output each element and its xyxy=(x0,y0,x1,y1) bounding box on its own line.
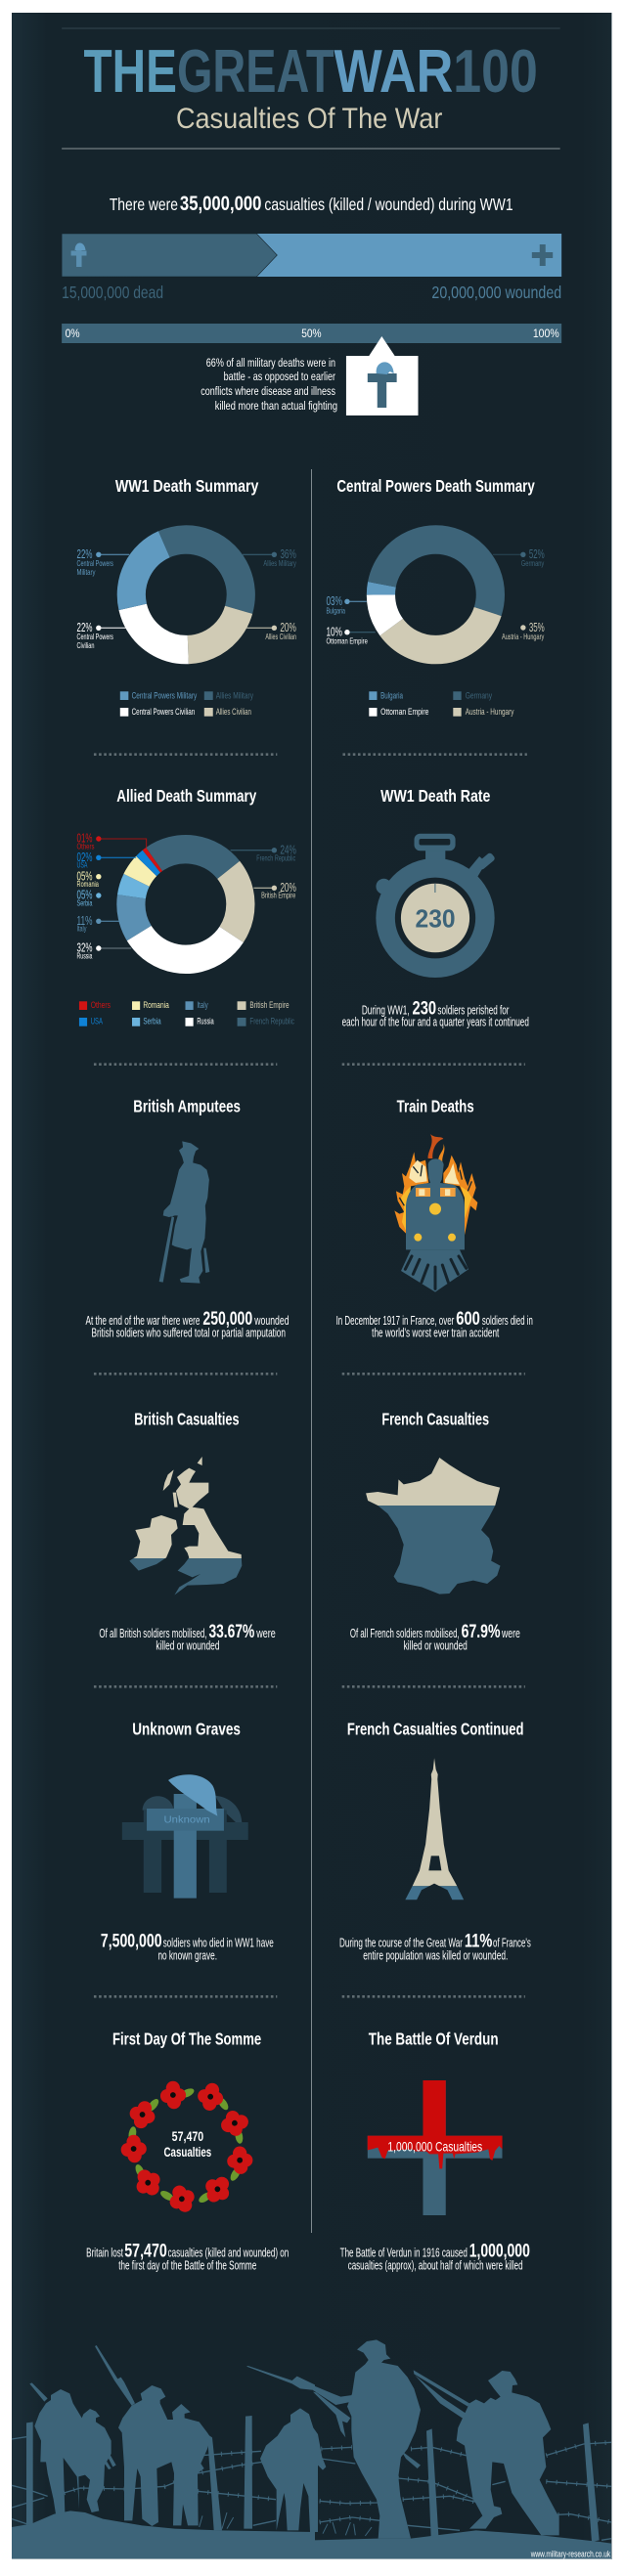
caption: entire population was killed or wounded. xyxy=(363,1948,508,1963)
callouts: 22% xyxy=(77,547,92,561)
ground xyxy=(313,2530,611,2558)
legend: Italy xyxy=(197,1000,208,1010)
title: WAR xyxy=(334,38,453,106)
callouts: Ottoman Empire xyxy=(326,637,368,646)
caption: of France's xyxy=(493,1936,531,1950)
66 percent note: battle - as opposed to earlier xyxy=(224,370,335,383)
title: THE xyxy=(84,38,177,106)
donut chart xyxy=(380,540,490,650)
icon: map of british isles xyxy=(129,1457,242,1595)
heading: First Day Of The Somme xyxy=(112,2029,261,2048)
caption: Of all British soldiers mobilised, xyxy=(99,1626,206,1640)
caption: casualties (killed and wounded) on xyxy=(168,2246,289,2260)
percentage scale: 0% xyxy=(66,327,80,340)
dead label: 15,000,000 dead xyxy=(62,283,163,302)
caption: In December 1917 in France, over xyxy=(336,1313,455,1328)
icon: medical cross xyxy=(532,244,553,266)
icon: cross with helmet xyxy=(71,242,86,267)
heading: WW1 Death Summary xyxy=(115,476,258,496)
legend: Austria - Hungary xyxy=(466,707,514,717)
fence posts xyxy=(26,2416,252,2530)
legend: Others xyxy=(91,1000,111,1010)
donut chart xyxy=(114,522,258,667)
center divider xyxy=(311,469,313,2233)
caption: 33.67% xyxy=(208,1622,254,1642)
panel: french casualties xyxy=(350,1409,520,1653)
heading: The Battle Of Verdun xyxy=(369,2029,499,2048)
icon: stopwatch xyxy=(376,834,496,978)
percentage scale: 100% xyxy=(533,327,559,340)
title xyxy=(84,38,538,106)
casualties summary xyxy=(62,193,561,415)
dead versus wounded bar xyxy=(62,234,561,277)
heading: French Casualties Continued xyxy=(347,1719,523,1738)
heading: Central Powers Death Summary xyxy=(336,476,535,496)
panel: train deaths xyxy=(336,1096,533,1340)
callouts: Civilian xyxy=(77,641,94,650)
legend: Allies Civilian xyxy=(216,707,251,717)
panel: french casualties continued xyxy=(339,1719,531,1963)
callouts: Others xyxy=(77,843,94,851)
soldiers 7 and 8 with rifles xyxy=(414,2370,559,2535)
right edge line xyxy=(611,13,612,2559)
66 percent note: killed more than actual fighting xyxy=(215,399,337,413)
callouts: 03% xyxy=(326,594,342,608)
legend: Germany xyxy=(466,690,492,700)
callouts: Austria - Hungary xyxy=(502,633,544,641)
caption: During the course of the Great War xyxy=(339,1936,463,1950)
legend: British Empire xyxy=(249,1000,290,1010)
callouts: Central Powers xyxy=(77,633,113,641)
wounded label: 20,000,000 wounded xyxy=(431,283,561,302)
caption: British soldiers who suffered total or partial amputation xyxy=(91,1326,286,1340)
icon: poppy wreath xyxy=(121,2080,252,2216)
soldier 6 xyxy=(313,2339,421,2539)
callouts: Military xyxy=(77,568,95,577)
66 percent note: 66% of all military deaths were in xyxy=(206,356,335,370)
caption xyxy=(99,1622,276,1653)
callouts: 05% xyxy=(77,889,92,902)
soldiers 3 and 4 xyxy=(95,2345,210,2526)
panel: british casualties xyxy=(99,1409,276,1653)
callouts: Romania xyxy=(77,880,99,889)
caption xyxy=(350,1622,520,1653)
legend: Russia xyxy=(197,1017,214,1026)
casualties headline: There were xyxy=(110,195,178,214)
soldiers 1 and 2 xyxy=(29,2382,116,2514)
caption: Britain lost xyxy=(86,2246,123,2260)
callouts: Russia xyxy=(77,951,93,960)
heading: WW1 Death Rate xyxy=(380,786,490,806)
callouts: 22% xyxy=(77,621,92,634)
callouts xyxy=(77,547,296,650)
panel: unknown graves xyxy=(101,1719,274,1963)
caption: killed or wounded xyxy=(404,1638,468,1653)
caption: soldiers died in xyxy=(482,1313,533,1328)
title: GREAT xyxy=(177,38,334,106)
heading: British Casualties xyxy=(134,1409,240,1428)
icon: poppy wreath: 57,470 xyxy=(172,2128,203,2144)
caption: casualties (approx), about half of which were killed xyxy=(348,2258,523,2273)
callouts: British Empire xyxy=(261,891,296,899)
legend xyxy=(120,690,253,717)
callouts: 02% xyxy=(77,851,92,864)
legend: Romania xyxy=(143,1000,169,1010)
panel: british amputees xyxy=(85,1096,290,1340)
icon: amputee soldier silhouette xyxy=(159,1141,209,1284)
callouts: 35% xyxy=(529,621,545,634)
header xyxy=(62,28,560,149)
panel: first day of the somme xyxy=(86,2029,289,2273)
caption: The Battle of Verdun in 1916 caused xyxy=(340,2246,468,2260)
barbed wire xyxy=(12,2437,276,2529)
donut chart xyxy=(110,828,262,981)
icon: map of france xyxy=(366,1458,501,1594)
caption: 250,000 xyxy=(202,1309,252,1330)
rifle of soldier 6 xyxy=(246,2366,315,2390)
callouts: Bulgaria xyxy=(326,606,345,615)
legend xyxy=(79,1000,294,1026)
66 percent note: conflicts where disease and illness xyxy=(201,384,335,398)
caption: 600 xyxy=(456,1309,480,1330)
heading: Unknown Graves xyxy=(132,1719,241,1738)
callouts: 01% xyxy=(77,831,92,846)
caption: 11% xyxy=(465,1932,492,1952)
caption xyxy=(340,2242,530,2273)
callouts: 20% xyxy=(280,621,296,634)
panel: allied death summary xyxy=(77,786,296,1026)
casualties headline: 35,000,000 xyxy=(180,193,261,215)
callouts: 36% xyxy=(280,547,296,561)
caption xyxy=(85,1309,290,1340)
caption: were xyxy=(501,1626,520,1640)
callouts: Allies Civilian xyxy=(265,633,296,641)
caption xyxy=(336,1309,533,1340)
callouts: 24% xyxy=(280,843,296,856)
panel: WW1 death summary xyxy=(77,476,296,717)
caption: 7,500,000 xyxy=(101,1932,162,1952)
subtitle: Casualties Of The War xyxy=(176,103,442,135)
callouts: 05% xyxy=(77,869,92,883)
icon: stopwatch: 230 xyxy=(416,905,456,933)
legend: Central Powers Military xyxy=(132,690,198,700)
percentage scale: 50% xyxy=(301,327,322,340)
legend: Allies Military xyxy=(216,690,253,700)
callouts xyxy=(77,831,296,960)
callouts: 52% xyxy=(529,547,545,561)
icon: eiffel tower xyxy=(405,1758,464,1899)
callouts xyxy=(326,547,545,646)
infographic content xyxy=(62,28,561,2273)
caption: were xyxy=(256,1626,276,1640)
caption: 57,470 xyxy=(124,2242,167,2262)
icon: burning train xyxy=(394,1134,477,1292)
caption xyxy=(101,1932,274,1963)
barbed wire xyxy=(320,2442,611,2540)
soldier 5 xyxy=(260,2408,326,2532)
icon: crosses with helmets xyxy=(122,1774,248,1899)
caption: 67.9% xyxy=(462,1622,501,1642)
panel: central powers death summary xyxy=(326,476,545,717)
callouts: 10% xyxy=(326,625,342,638)
legend xyxy=(369,690,514,717)
caption: the first day of the Battle of the Somme xyxy=(118,2258,256,2273)
caption: wounded xyxy=(254,1313,290,1328)
callouts: Italy xyxy=(77,925,86,934)
heading: French Casualties xyxy=(381,1409,489,1428)
fence posts xyxy=(426,2423,600,2542)
caption: killed or wounded xyxy=(156,1638,219,1653)
caption: 1,000,000 xyxy=(469,2242,530,2262)
caption: the world's worst ever train accident xyxy=(372,1326,500,1340)
icon: poppy wreath: Casualties xyxy=(164,2144,211,2160)
callouts: Central Powers xyxy=(77,559,113,568)
legend: French Republic xyxy=(249,1017,294,1026)
icon: bleeding cross: 1,000,000 Casualties xyxy=(387,2138,482,2154)
panel: battle of verdun xyxy=(340,2029,530,2273)
caption: During WW1, xyxy=(362,1002,410,1017)
66 percent marker with cross icon xyxy=(346,336,419,415)
legend: Serbia xyxy=(143,1017,161,1026)
66 percent note xyxy=(201,356,337,413)
caption: At the end of the war there were xyxy=(85,1313,201,1328)
legend: Ottoman Empire xyxy=(380,707,428,717)
heading: British Amputees xyxy=(133,1096,241,1115)
callouts: French Republic xyxy=(256,854,295,863)
heading: Train Deaths xyxy=(397,1096,474,1115)
callouts: Allies Military xyxy=(263,559,296,568)
footer soldiers silhouette, right half xyxy=(313,2339,611,2558)
casualties headline: casualties (killed / wounded) during WW1 xyxy=(264,195,513,214)
icon: bleeding cross xyxy=(368,2080,503,2215)
panel: death rate xyxy=(342,786,529,1029)
title: 100 xyxy=(453,38,538,106)
icon: crosses with helmets: Unknown xyxy=(164,1815,210,1825)
legend: Bulgaria xyxy=(380,690,403,700)
caption xyxy=(339,1932,531,1963)
callouts: 32% xyxy=(77,941,92,955)
legend: Central Powers Civilian xyxy=(132,707,195,717)
caption: soldiers who died in WW1 have xyxy=(163,1936,274,1950)
casualties headline xyxy=(110,193,513,215)
callouts: Germany xyxy=(521,559,544,568)
caption: soldiers perished for xyxy=(437,1002,510,1017)
callouts: Serbia xyxy=(77,899,93,908)
bottom edge line xyxy=(12,2558,612,2559)
heading: Allied Death Summary xyxy=(116,786,256,806)
legend: USA xyxy=(91,1017,103,1026)
caption: no known grave. xyxy=(157,1948,217,1963)
caption xyxy=(86,2242,289,2273)
caption: 230 xyxy=(413,998,436,1019)
percentage scale xyxy=(62,324,561,343)
callouts: USA xyxy=(77,861,88,870)
caption: Of all French soldiers mobilised, xyxy=(350,1626,460,1640)
caption xyxy=(342,998,529,1029)
ground xyxy=(12,2511,315,2558)
callouts: 11% xyxy=(77,914,92,928)
footer soldiers silhouette, left half xyxy=(12,2345,326,2558)
callouts: 20% xyxy=(280,881,296,895)
